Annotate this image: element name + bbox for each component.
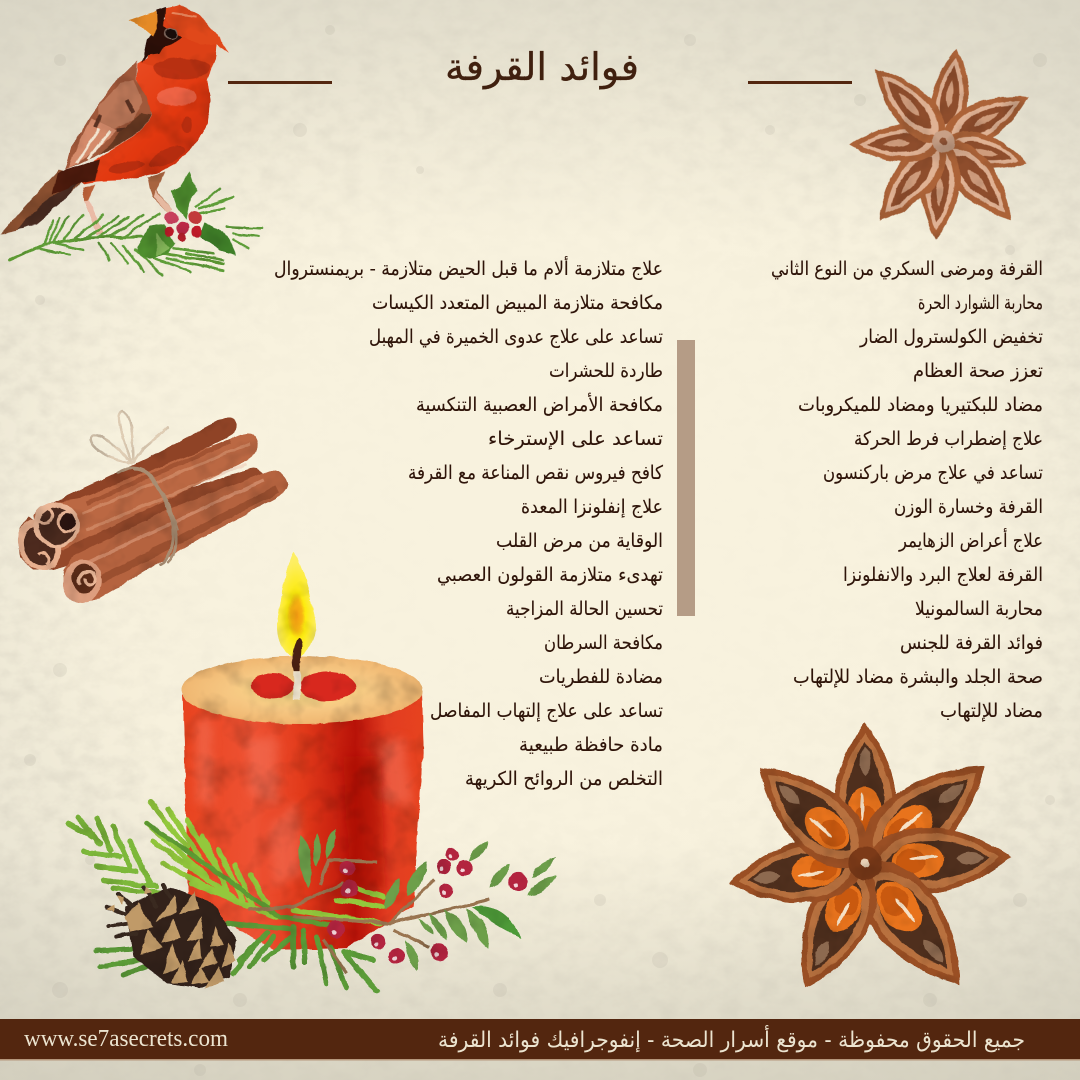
item: محاربة السالمونيلا: [915, 598, 1043, 620]
bottom stick: [63, 470, 288, 601]
bird body: [80, 45, 215, 184]
vertical divider bar: [677, 340, 695, 616]
candle top: [181, 656, 422, 724]
candle body: [182, 687, 423, 950]
holly leaves: [137, 171, 237, 259]
eye: [165, 28, 177, 38]
back stick: [50, 417, 237, 513]
illustration: red cardinal on branch: [0, 5, 262, 275]
pine branch: [9, 188, 262, 275]
item: تساعد على علاج إلتهاب المفاصل: [430, 700, 663, 723]
item: القرفة لعلاج البرد والانفلونزا: [843, 564, 1043, 586]
illustration: red candle with pine and berries: [68, 552, 557, 992]
footer band: [0, 1019, 1080, 1060]
item: التخلص من الروائح الكريهة: [465, 768, 663, 790]
head: [140, 17, 217, 80]
item: علاج إضطراب فرط الحركة: [854, 428, 1043, 451]
icon: star anise top right: [849, 46, 1037, 241]
illustration: cinnamon bundle: [9, 410, 288, 608]
item: مضاد للبكتيريا ومضاد للميكروبات: [798, 394, 1043, 416]
beak: [128, 11, 157, 37]
title: فوائد القرفة: [445, 45, 639, 90]
stick ends: [9, 499, 107, 608]
item: مضاد للإلتهاب: [940, 700, 1043, 722]
pine needles: [68, 802, 383, 992]
item: تخفيض الكولسترول الضار: [859, 326, 1043, 348]
footer website: www.se7asecrets.com: [24, 1026, 228, 1052]
twine: [117, 468, 178, 565]
item: مضادة للفطريات: [539, 666, 663, 688]
item: كافح فيروس نقص المناعة مع القرفة: [408, 462, 664, 484]
item: فوائد القرفة للجنس: [900, 632, 1043, 654]
list: benefits right column: [771, 258, 1043, 722]
item: تساعد على الإسترخاء: [488, 428, 663, 450]
pine cone: [107, 885, 237, 988]
rump: [52, 159, 100, 194]
lower-left stick: [17, 468, 263, 570]
item: علاج أعراض الزهايمر: [898, 528, 1043, 552]
middle stick: [33, 433, 258, 550]
melted wax pool: [251, 671, 355, 701]
item: تساعد على علاج عدوى الخميرة في المهبل: [369, 326, 663, 348]
item: صحة الجلد والبشرة مضاد للإلتهاب: [793, 666, 1043, 688]
wing: [65, 60, 152, 170]
crest: [159, 5, 229, 54]
item: علاج متلازمة ألام ما قبل الحيض متلازمة - بريمنستروال: [274, 256, 663, 280]
green sprig leaves: [299, 830, 557, 972]
icon: star anise bottom right: [724, 722, 1013, 1006]
twigs: [248, 860, 490, 973]
item: الوقاية من مرض القلب: [496, 530, 663, 552]
item: تحسين الحالة المزاجية: [506, 598, 663, 620]
item: مكافحة متلازمة المبيض المتعدد الكيسات: [372, 292, 663, 314]
item: تعزز صحة العظام: [913, 360, 1043, 382]
title rule right: [748, 81, 852, 84]
wick: [293, 638, 302, 672]
item: مكافحة السرطان: [544, 632, 663, 654]
item: مكافحة الأمراض العصبية التنكسية: [416, 393, 663, 416]
item: القرفة ومرضى السكري من النوع الثاني: [771, 258, 1043, 280]
item: مادة حافظة طبيعية: [519, 734, 663, 756]
item: علاج إنفلونزا المعدة: [521, 496, 663, 519]
flame: [277, 552, 316, 658]
legs: [83, 172, 173, 235]
tail feathers: [0, 169, 83, 235]
berries: [164, 211, 202, 242]
item: القرفة وخسارة الوزن: [894, 496, 1043, 518]
face mask: [142, 7, 182, 63]
item: تهدىء متلازمة القولون العصبي: [437, 564, 663, 586]
title rule left: [228, 81, 332, 84]
list: benefits left column: [274, 256, 664, 790]
item: طاردة للحشرات: [549, 360, 663, 382]
red berries: [327, 848, 528, 964]
item: تساعد في علاج مرض باركنسون: [823, 462, 1043, 484]
footer copyright: جميع الحقوق محفوظة - موقع أسرار الصحة - إنفوجرافيك فوائد القرفة: [438, 1025, 1025, 1053]
twine bow: [91, 410, 168, 463]
